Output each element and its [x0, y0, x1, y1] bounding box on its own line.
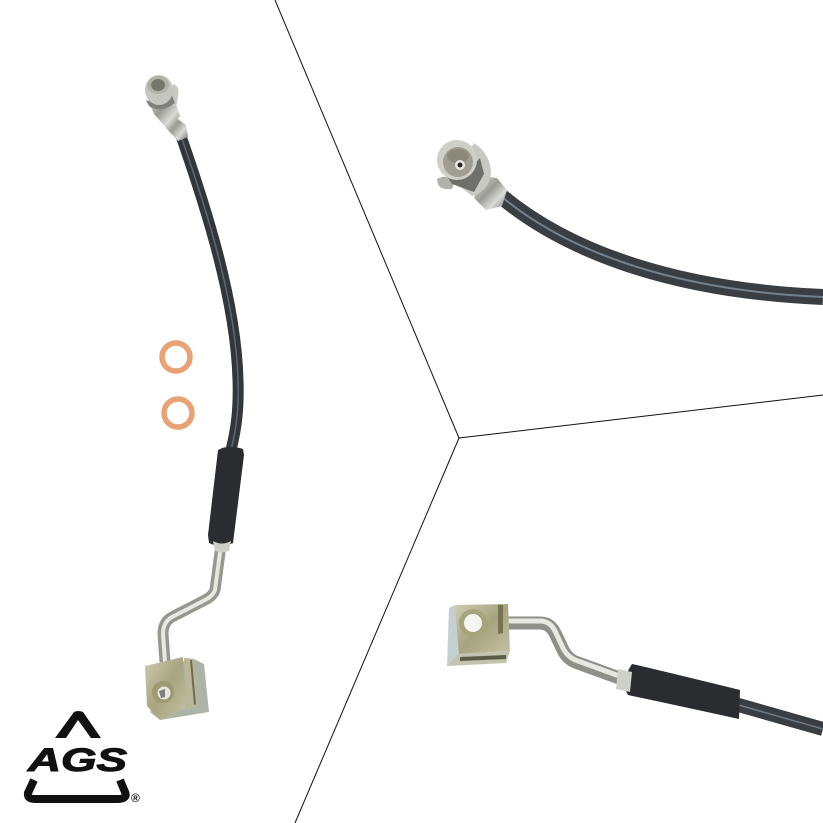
heat shrink sleeve — [625, 664, 740, 719]
tube collar — [616, 669, 632, 692]
metal tube — [163, 545, 221, 662]
heat shrink sleeve — [208, 447, 244, 546]
AGS logo — [27, 711, 140, 805]
copper washers — [162, 343, 192, 427]
crimp ferrule — [474, 176, 507, 210]
panel: bottom-right block close-up — [447, 604, 823, 729]
panel: full brake hose — [145, 75, 244, 720]
logo bottom bracket — [28, 780, 126, 799]
rubber hose — [735, 704, 823, 729]
panel: top-right fitting close-up — [437, 140, 823, 297]
rubber hose — [181, 136, 238, 450]
logo wordmark: AGS — [27, 742, 128, 778]
mounting block — [447, 604, 510, 666]
banjo fitting — [437, 140, 491, 196]
panel dividers — [275, 0, 823, 823]
mounting block — [145, 657, 209, 720]
logo top chevron — [55, 711, 101, 738]
tube collar — [213, 541, 231, 552]
top banjo fitting — [145, 75, 188, 141]
rubber hose — [502, 197, 823, 297]
metal tube — [508, 621, 622, 679]
registered mark: ® — [131, 791, 140, 805]
